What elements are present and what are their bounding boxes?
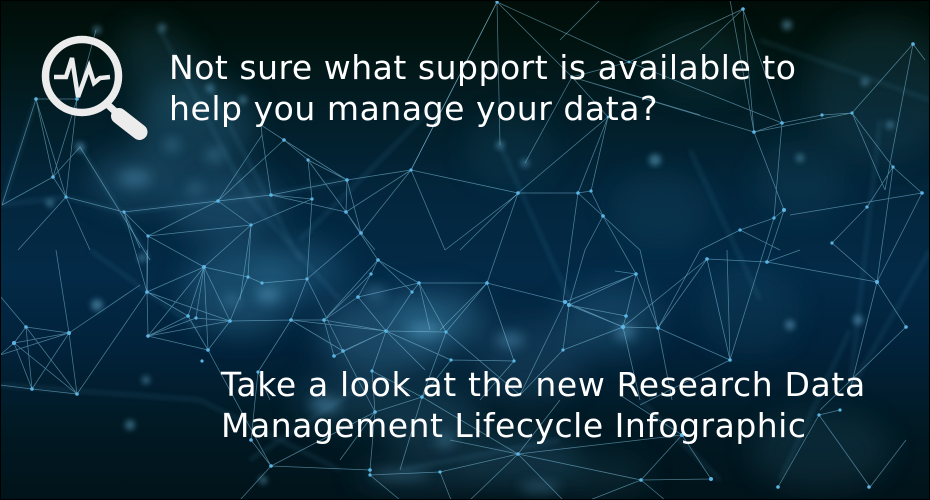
call to action text: Management Lifecycle Infographic [221, 406, 806, 445]
heading: support question: help you manage your data? [169, 89, 658, 128]
call to action text: Take a look at the new Research Data [221, 365, 866, 404]
heading: support question [169, 48, 796, 128]
heading: support question: Not sure what support is available to [169, 48, 796, 87]
call to action text [220, 365, 866, 445]
